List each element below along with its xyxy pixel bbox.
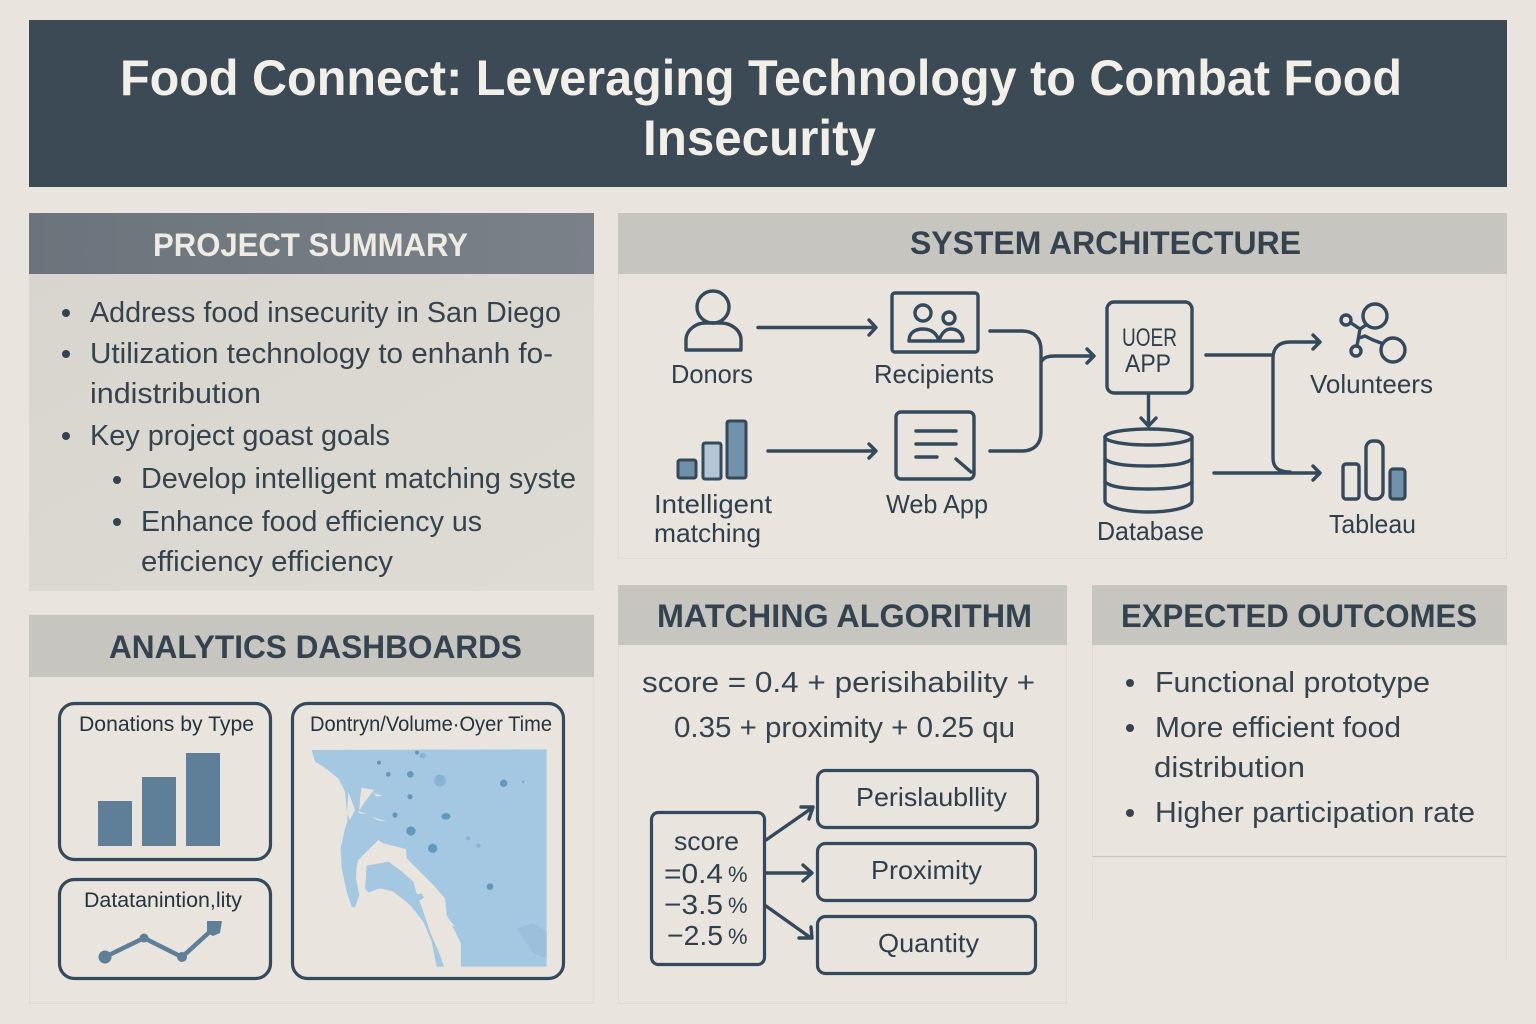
outcomes bullet list: distribution	[1154, 752, 1305, 784]
outcomes bullet list	[1126, 667, 1475, 829]
box: perishability	[818, 770, 1038, 828]
icon: intelligent matching	[654, 421, 773, 548]
box: user app: UOER	[1122, 324, 1177, 352]
box: score weights: %	[728, 893, 748, 918]
summary bullet list: Key project goast goals	[90, 420, 390, 452]
formula text	[642, 667, 1035, 744]
formula text: score = 0.4 + perisihability +	[642, 667, 1035, 699]
summary bullet list: Address food insecurity in San Diego	[90, 297, 561, 329]
outcomes bullet list: Functional prototype	[1155, 667, 1430, 699]
box: score weights: −3.5	[664, 889, 723, 920]
box: score weights: =0.4	[664, 858, 723, 889]
panel: project summary	[29, 213, 594, 591]
arrow: donors to recipients	[758, 320, 876, 335]
summary bullet list: Develop intelligent matching syste	[141, 463, 576, 495]
icon: web app: Web App	[886, 489, 988, 519]
arrows: score to factors	[766, 807, 813, 938]
box: perishability: Perislaubllity	[856, 782, 1007, 812]
heading: matching algorithm: MATCHING ALGORITHM	[657, 598, 1032, 634]
icon: intelligent matching: Intelligent	[654, 489, 773, 519]
arrow: matching to web app	[768, 444, 876, 458]
box: score weights: %	[728, 924, 748, 949]
box: user app: APP	[1125, 350, 1171, 378]
box: score weights: −2.5	[667, 920, 723, 951]
heading: project summary: PROJECT SUMMARY	[153, 227, 468, 263]
panel: matching algorithm	[618, 585, 1067, 1004]
box: user app	[1107, 302, 1192, 393]
outcomes bullet list: Higher participation rate	[1155, 797, 1475, 829]
heading: system architecture: SYSTEM ARCHITECTURE	[910, 225, 1301, 261]
panel: system architecture	[618, 213, 1507, 558]
map of San Diego	[312, 749, 547, 967]
icon: intelligent matching: matching	[654, 518, 761, 548]
outcomes bullet list: More efficient food	[1155, 712, 1401, 744]
box: proximity	[818, 844, 1036, 900]
box: proximity: Proximity	[871, 855, 982, 885]
summary bullet list: Utilization technology to enhanh fo-	[90, 338, 553, 370]
icon: tableau bars	[1329, 441, 1416, 539]
connector: recipients and web app to user app	[990, 331, 1094, 451]
formula text: 0.35 + proximity + 0.25 qu	[674, 712, 1015, 744]
heading: expected outcomes: EXPECTED OUTCOMES	[1121, 598, 1477, 634]
arrow: user app to database	[1141, 394, 1156, 426]
icon: donors	[671, 291, 753, 389]
icon: recipients	[874, 293, 994, 389]
summary bullet list: efficiency efficiency	[141, 546, 394, 578]
box: quantity	[818, 916, 1036, 974]
summary bullet list: Enhance food efficiency us	[141, 506, 482, 538]
icon: volunteers	[1310, 304, 1433, 399]
summary bullet list	[62, 297, 576, 578]
box: score weights	[652, 812, 764, 964]
map card: donation volume over time	[292, 704, 564, 978]
box: score weights: %	[728, 862, 748, 887]
chart card: line chart: Datatanintion,lity	[84, 889, 242, 912]
chart card: donations by type: Donations by Type	[79, 713, 254, 736]
box: score weights: score	[674, 826, 739, 856]
connector: user app and database to outputs	[1206, 335, 1320, 480]
icon: recipients: Recipients	[874, 359, 994, 389]
summary bullet list: indistribution	[90, 378, 261, 410]
icon: database	[1097, 429, 1204, 546]
heading: analytics dashboards: ANALYTICS DASHBOARDS	[109, 629, 522, 665]
icon: database: Database	[1097, 516, 1204, 546]
title banner: Food Connect: Leveraging Technology to Combat Food	[120, 50, 1402, 106]
icon: volunteers: Volunteers	[1310, 369, 1433, 399]
title banner	[29, 20, 1507, 187]
chart card: donations by type	[60, 704, 270, 860]
panel: expected outcomes	[1092, 585, 1507, 960]
map card: donation volume over time: Dontryn/Volume·Oyer Time	[310, 713, 552, 736]
icon: donors: Donors	[671, 359, 753, 389]
icon: web app	[886, 412, 988, 519]
box: quantity: Quantity	[878, 928, 979, 958]
icon: tableau bars: Tableau	[1329, 509, 1416, 539]
panel: analytics dashboards	[29, 615, 594, 1004]
title banner: Insecurity	[643, 110, 876, 166]
chart card: line chart	[60, 880, 270, 978]
